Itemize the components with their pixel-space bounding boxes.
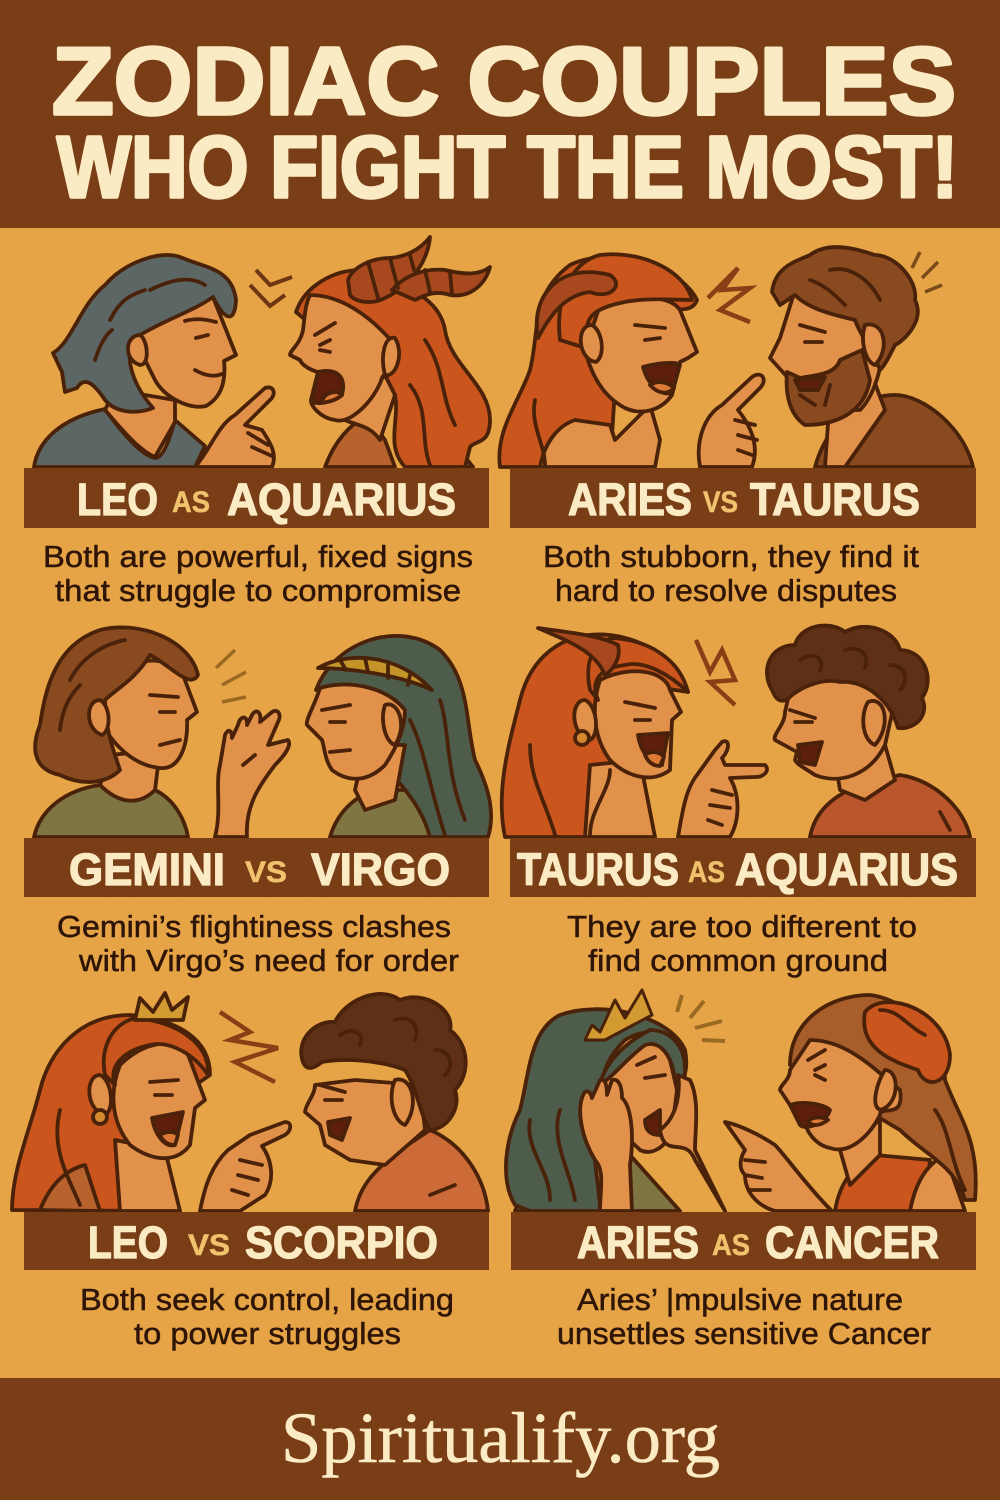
description: to power struggles <box>134 1316 401 1351</box>
description <box>43 539 473 608</box>
description: Both seek control, leading <box>80 1282 454 1317</box>
label: ARIES AS CANCER: AS <box>712 1229 750 1262</box>
label: LEO VS SCORPIO: LEO <box>88 1217 168 1268</box>
label: LEO VS SCORPIO: SCORPIO <box>245 1217 438 1268</box>
panel: Taurus vs Aquarius <box>502 626 976 978</box>
description <box>567 909 917 978</box>
description: with Virgo’s need for order <box>78 943 459 978</box>
shout mark <box>708 268 750 322</box>
description: unsettles sensitive Cancer <box>557 1316 931 1351</box>
label band <box>24 838 489 897</box>
label band <box>24 468 489 528</box>
label: GEMINI VS VIRGO: VS <box>245 856 287 889</box>
label: ARIES VS TAURUS <box>568 474 920 525</box>
illustration: arguing couple 2 <box>499 247 973 467</box>
label: ARIES VS TAURUS: ARIES <box>568 474 692 525</box>
label: ARIES AS CANCER <box>577 1217 939 1268</box>
description: Gemini’s flightiness clashes <box>57 909 451 944</box>
illustration: arguing couple 1 <box>34 237 490 467</box>
footer brand: Spiritualify.org <box>281 1398 720 1478</box>
label band <box>511 1212 976 1270</box>
label: TAURUS AS AQUARIUS <box>517 844 958 895</box>
label: GEMINI VS VIRGO <box>69 844 450 895</box>
description: Aries’ |mpulsive nature <box>577 1282 903 1317</box>
label: ARIES VS TAURUS: VS <box>703 486 738 519</box>
description <box>57 909 459 978</box>
description: find common ground <box>588 943 888 978</box>
icon: crown <box>585 990 652 1040</box>
header band with title <box>0 0 1000 228</box>
description <box>80 1282 454 1351</box>
panel: Aries vs Taurus <box>499 247 976 608</box>
label: ARIES AS CANCER: ARIES <box>577 1217 699 1268</box>
panel: Gemini vs Virgo <box>24 627 491 978</box>
label: TAURUS AS AQUARIUS: TAURUS <box>517 844 679 895</box>
panel: Leo vs Scorpio <box>12 993 489 1351</box>
illustration: arguing couple 6 <box>506 995 976 1211</box>
description: Both stubborn, they find it <box>543 539 919 574</box>
label: LEO VS SCORPIO: VS <box>188 1229 230 1262</box>
panel: Aries vs Cancer <box>506 990 976 1351</box>
label: ARIES AS CANCER: CANCER <box>765 1217 939 1268</box>
label band <box>24 1212 489 1270</box>
description <box>557 1282 931 1351</box>
label: LEO AS AQUARIUS: AS <box>172 486 210 519</box>
panel: Leo vs Aquarius <box>24 237 490 608</box>
label: TAURUS AS AQUARIUS: AQUARIUS <box>735 844 958 895</box>
label: LEO AS AQUARIUS <box>77 474 456 525</box>
spark lines <box>216 650 246 702</box>
label: LEO AS AQUARIUS: LEO <box>77 474 158 525</box>
label band <box>510 838 976 897</box>
description: hard to resolve disputes <box>555 573 897 608</box>
shout mark <box>696 640 735 705</box>
label: TAURUS AS AQUARIUS: AS <box>688 856 725 889</box>
spark lines <box>677 995 725 1041</box>
description: They are too difterent to <box>567 909 917 944</box>
title line 1: ZODIAC COUPLES <box>52 28 956 135</box>
label: GEMINI VS VIRGO: GEMINI <box>69 844 225 895</box>
label: LEO AS AQUARIUS: AQUARIUS <box>227 474 456 525</box>
shout mark <box>220 1012 278 1082</box>
description <box>543 539 919 608</box>
description: that struggle to compromise <box>55 573 461 608</box>
label: GEMINI VS VIRGO: VIRGO <box>311 844 450 895</box>
label: ARIES VS TAURUS: TAURUS <box>750 474 920 525</box>
label: LEO VS SCORPIO <box>88 1217 438 1268</box>
illustration: arguing couple 3 <box>34 627 491 837</box>
illustration: arguing couple 4 <box>502 626 970 837</box>
shout mark <box>250 270 292 306</box>
spark lines <box>912 252 942 292</box>
description: Both are powerful, fixed signs <box>43 539 473 574</box>
footer band <box>0 1378 1000 1500</box>
illustration: arguing couple 5 <box>12 993 488 1211</box>
label band <box>510 468 976 528</box>
